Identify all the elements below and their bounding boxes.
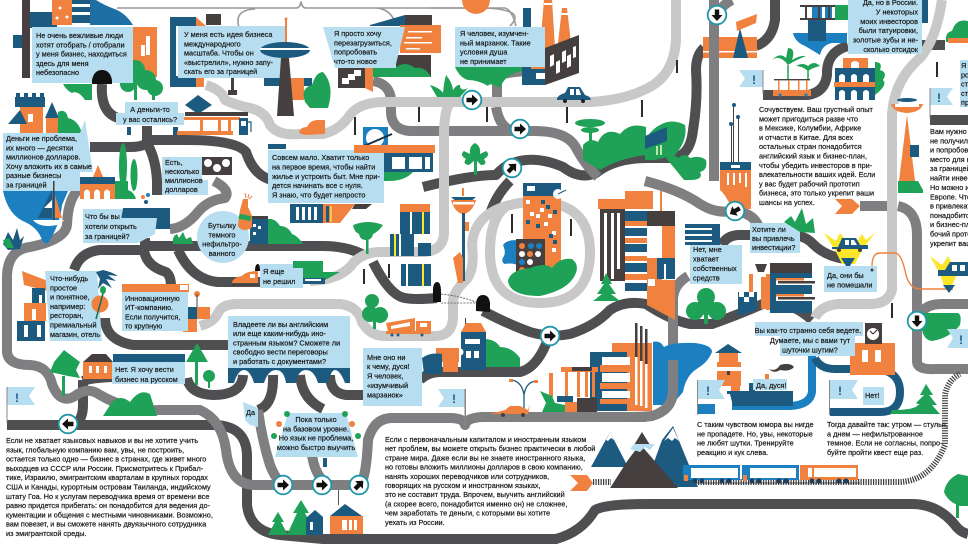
- arrow: bottom right 1: [274, 476, 292, 494]
- icon: weird-behaviour clock building: [850, 323, 895, 375]
- panel: several million: долларов: [165, 185, 198, 194]
- flag: bottom centre: !: [452, 392, 456, 406]
- panel: international idea: международного: [184, 39, 241, 48]
- panel: not decided: не решил: [263, 277, 295, 286]
- panel: international idea: «выстрелил», нужно запу-: [184, 58, 274, 67]
- arrow: bottom right 2: [313, 476, 331, 494]
- panel: rude people question: небезопасно: [36, 68, 79, 77]
- panel: I don't need it: [363, 348, 422, 406]
- icon: green tree: [686, 288, 726, 324]
- panel: something simple: [45, 271, 102, 341]
- text block: with capital and language: нанять хороших переводчиков или сотрудников,: [385, 472, 549, 481]
- text block: then let's do this: темное. Если не согласны, попро-: [827, 439, 943, 448]
- icon: factory with chimneys: [522, 0, 579, 85]
- icon: big striped building: [598, 191, 675, 320]
- sub-panel: text what to do with sad experience: бизнеса, это только укрепит ваши: [759, 189, 874, 198]
- panel: emerald man: ный марзанок. Такие: [460, 38, 531, 47]
- panel: not enough own funds: хватает: [693, 254, 719, 264]
- panel: money left question: у вас остались?: [123, 115, 177, 124]
- text block: with capital and language: Если с первоначальным капиталом и иностранным языком: [385, 435, 586, 444]
- panel: emerald man: [455, 27, 545, 88]
- panel: money left question: [116, 102, 184, 125]
- text block: then let's do this: буйте пройти квест еще раз.: [827, 448, 923, 457]
- text block: with capital and language: [385, 435, 596, 527]
- panel: several million: Есть,: [165, 158, 183, 167]
- text block: with capital and language: чем заработать те деньги, с которыми вы хотите: [385, 509, 550, 518]
- icon: building stripes and orange roof: [290, 204, 372, 223]
- panel: business in Russian: бизнес на русском: [115, 375, 178, 384]
- arrow: right upper: [463, 91, 481, 109]
- panel: international idea: масштаба. Чтобы он: [184, 49, 254, 58]
- flag: humour: [697, 380, 725, 415]
- panel: something simple: простое: [50, 283, 77, 292]
- sub-panel: text what to do with sad experience: чтобы убедить инвесторов в при-: [759, 161, 873, 170]
- panel: what to open abroad: хотели открыть: [85, 222, 137, 231]
- panel: restart abroad: [323, 15, 441, 92]
- panel: dark unfiltered beer: Бутылку: [208, 221, 236, 230]
- flags: [6, 70, 968, 425]
- panel: right edge box: [960, 60, 968, 107]
- panel: yes dear: Да, дуся!: [756, 381, 787, 390]
- text block: without language skills: выходцев из СССР или России. Присмотритесь к Прибал-: [6, 464, 204, 473]
- icon: skew building left: [17, 271, 48, 341]
- icon: orange car: [232, 264, 260, 286]
- arrow: right middle: [511, 120, 529, 138]
- panel: not enough own funds: Нет, мне: [693, 245, 722, 254]
- icon: yellow car far right: [930, 256, 968, 293]
- icon: pine tree: [593, 273, 620, 301]
- icon: green bush near lamp: [540, 391, 565, 412]
- text block: without language skills: язык, глобальную компанию вам, увы, не построить,: [6, 445, 184, 454]
- panel: dark unfiltered beer: темного: [209, 230, 235, 239]
- panel: strange behaviour: Вы как-то странно себя ведете.: [755, 326, 861, 335]
- panel: money is no problem: миллионов долларов.: [6, 153, 80, 162]
- panel: basic level: [271, 411, 361, 457]
- panel: money is no problem: Деньги не проблема,: [6, 134, 77, 143]
- icon: navy car: [557, 87, 591, 103]
- icon: left tree: [50, 350, 80, 396]
- flag: far right: [947, 329, 968, 348]
- panel: innovative IT company: [122, 292, 188, 331]
- panel: international idea: скать его за границей: [184, 67, 257, 76]
- icon: domino: [202, 157, 232, 175]
- panel: something simple: и понятное,: [50, 293, 90, 302]
- icon: oil pump: [703, 0, 757, 181]
- flag: no: !: [838, 384, 842, 398]
- thin grey top connector lines: [117, 2, 516, 30]
- icon: green hills: [583, 126, 646, 170]
- panel: basic level: Пока только: [295, 415, 337, 424]
- panel: money is no problem: Хочу вложить их в самые: [6, 162, 92, 171]
- panel: do you speak languages: или еще каким-нибудь ино-: [233, 329, 326, 338]
- icon: antennas building: [720, 103, 751, 209]
- text block: without language skills: [6, 436, 213, 538]
- panel: I don't need it: «изумчивый: [367, 381, 408, 390]
- panel: innovative IT company: то крупную: [125, 322, 163, 331]
- panel: dark unfiltered beer: [197, 211, 249, 263]
- text block: with capital and language: говорящих на русском и иностранном языках,: [385, 481, 541, 490]
- sub-panel: text what to do with sad experience: английский язык и бизнес-план,: [759, 152, 867, 160]
- panel: international idea: [170, 14, 285, 95]
- icon: yellow car: [824, 233, 875, 269]
- road network: medium grey routes: [7, 71, 968, 485]
- panel: not much left: на первое время, чтобы найти: [272, 162, 375, 171]
- panel: innovative IT company: Если получится,: [125, 312, 180, 321]
- sub-panel: text what to do with sad experience: у вас будет рабочий прототип: [759, 179, 860, 188]
- panel: several million: [162, 157, 208, 195]
- icon: palm and orange ball: [92, 270, 118, 319]
- icon: house above pond: [715, 344, 742, 362]
- flag: oil field: [739, 70, 764, 94]
- icon: top-left factory and cloud: [13, 0, 157, 100]
- icon: water tower: [793, 5, 848, 55]
- panel: money is no problem: за границей: [6, 180, 47, 190]
- arrow: up-right: [499, 155, 525, 181]
- panel: not decided: Я еще: [263, 267, 284, 276]
- panel: what to open abroad: за границей?: [85, 232, 130, 241]
- text block: then let's do this: [827, 420, 948, 457]
- tree by tunnel: [120, 60, 163, 100]
- panel: tattooed investors: сколько отсидок: [863, 45, 919, 54]
- icon: orange car low: [490, 404, 530, 417]
- text block: with such sense of humour: не любят шутки. Тренируйте: [697, 439, 794, 448]
- panel: rude people question: [32, 27, 133, 83]
- panel: international idea: У меня есть идея бизнеса: [184, 30, 273, 39]
- text block: without language skills: остается только одно — бизнес в странах, где живет много: [6, 455, 206, 464]
- panel: not much left: Я знаю, что будет непросто: [272, 191, 365, 200]
- text block: with capital and language: это не составит труда. Впрочем, выучить английский: [385, 490, 565, 499]
- flag: bottom left: [6, 387, 35, 423]
- sub-panel: text what to do with sad experience: [759, 105, 875, 207]
- panel: not enough own funds: средств: [693, 274, 720, 282]
- road network: light grey routes: [200, 0, 942, 336]
- panel: basic level: можно быстро выучить: [277, 443, 355, 452]
- panel: business in Russian: Нет. Я хочу вести: [115, 365, 174, 374]
- panel: strange behaviour: [755, 322, 863, 356]
- icon: tunnels with dashed link: [433, 282, 490, 312]
- icon: small plant: [173, 232, 193, 244]
- icon: arched bridge: [80, 165, 136, 199]
- panel: money is no problem: [3, 120, 93, 191]
- panel: emerald man: не принимает: [460, 57, 507, 66]
- panel: innovative IT company: Инновационную: [125, 294, 180, 303]
- arrow: down-left: [722, 198, 748, 224]
- panel: not enough own funds: [685, 224, 742, 284]
- icon: house with roof: [422, 318, 520, 374]
- panel: I don't need it: марзанок»: [367, 390, 403, 400]
- panel: do you speak languages: свободно вести переговоры: [233, 348, 328, 357]
- icon: bus stop with sign: [354, 127, 435, 181]
- panel: basic level: Но язык не проблема,: [279, 434, 353, 442]
- icon: tree left of truck: [362, 294, 388, 329]
- icon: pair of trees: [186, 343, 215, 388]
- text block: with capital and language: нет проблем, вы можете открыть бизнес практически в любой: [385, 444, 596, 453]
- panel: do you speak languages: Владеете ли вы английским: [233, 320, 328, 329]
- panel: want investments: вы привлечь: [752, 234, 795, 243]
- icon: tunnel: [92, 70, 112, 84]
- panel: right edge box: ст: [961, 80, 968, 89]
- icon: green hill with signboard: [645, 122, 706, 180]
- sub-panel: text what to do with sad experience: и отчасти в Китае. Для всех: [759, 133, 853, 142]
- panel: restart abroad: попробовать: [334, 48, 377, 57]
- icon: bottom pines: [268, 500, 316, 535]
- panel: money is no problem: их много — десятки: [6, 143, 73, 152]
- icon: green and white vehicle: [293, 261, 340, 284]
- icon: pine right: [890, 384, 940, 414]
- icon: gas station: [177, 95, 251, 135]
- icon: bottom-right tree: [944, 474, 968, 518]
- panel: tattooed investors: моих инвесторов: [860, 17, 918, 26]
- text block: right edge: [930, 127, 968, 248]
- panel: basic level: на базовом уровне.: [283, 424, 349, 434]
- panel: what to open abroad: Что бы вы: [85, 212, 120, 221]
- panel: not enough own funds: собственных: [693, 264, 737, 273]
- text block: with capital and language: (а скорее всего, понадобится именно он) не сложнее,: [385, 499, 567, 508]
- panel: right edge box: Я: [961, 61, 966, 70]
- panel: tattooed investors: золотые зубы и не-: [853, 36, 919, 45]
- sub-panel: text what to do with sad experience: остальных стран понадобится: [759, 142, 862, 151]
- panel: not much left: Совсем мало. Хватит только: [272, 153, 369, 162]
- icon: factory with checks: [738, 263, 815, 316]
- text block: without language skills: вам повезет, и вы сможете нанять двуязычного сотрудника: [6, 520, 207, 529]
- icon: tree at right of ship: [353, 222, 383, 254]
- panel: do you speak languages: и работать с документами?: [233, 357, 326, 366]
- panel: dark unfiltered beer: нефильтро-: [202, 240, 242, 249]
- panel: rude people question: у меня бизнес, находиться: [36, 50, 127, 59]
- icon: mountains: [591, 426, 698, 488]
- panel: business in Russian: [83, 354, 185, 384]
- icon: central tower in ring: [502, 183, 577, 296]
- panel: rude people question: хотят отобрать / отобрали: [36, 40, 125, 49]
- panel: something simple: магазин, отель: [50, 330, 100, 339]
- icon: leaf plant: [430, 75, 468, 97]
- panel: emerald man: условия душа: [460, 48, 508, 57]
- panel: restart abroad: Я просто хочу: [334, 29, 382, 38]
- flag: bottom left: !: [15, 391, 19, 405]
- panel: dark unfiltered beer: ванного: [209, 249, 235, 258]
- text block: with such sense of humour: С таким чувством юмора вы нигде: [697, 420, 814, 429]
- text block: with capital and language: уехать из России.: [385, 518, 445, 527]
- panel: what to open abroad: [83, 193, 170, 243]
- text block: without language skills: тике, Израилю, эмигрантским кварталам в крупных городах: [6, 473, 208, 482]
- icon: orange bar and squares: [122, 284, 210, 332]
- panel: would not hurt: не помешали: [827, 280, 872, 289]
- icon: green hill right: [922, 313, 961, 341]
- railway track: [593, 374, 960, 483]
- panel: not decided: [260, 264, 303, 288]
- icon: clover tree: [462, 143, 488, 175]
- text block: then let's do this: Тогда давайте так: утром — стулья,: [827, 420, 948, 429]
- panel: something simple: например:: [50, 302, 85, 311]
- sub-panel: text what to do with sad experience: шансы на успех.: [759, 198, 815, 207]
- flag: bottom centre: [438, 389, 466, 425]
- text block: then let's do this: а днем — нефильтрованное: [827, 429, 923, 438]
- icon: green bush: [103, 392, 157, 416]
- road network: coloured lower routes: [732, 253, 953, 412]
- text block: with capital and language: но готовы вложить миллионы долларов в свою компанию,: [385, 463, 583, 472]
- icon: acacia tree: [575, 119, 605, 145]
- panel: tattooed investors: У некоторых: [876, 7, 918, 16]
- panel: want investments: [750, 223, 800, 253]
- text block: with such sense of humour: реакцию и кук слева.: [697, 448, 768, 457]
- panel: I don't need it: Мне оно ни: [367, 353, 405, 362]
- panel: several million: миллионов: [165, 176, 203, 185]
- text block: without language skills: США и Канады, курортным островам Таиланда, индийскому: [6, 482, 211, 492]
- panel: yes: [243, 402, 258, 427]
- icon: bottom houses: [306, 490, 363, 535]
- panel: something simple: премиальный: [50, 320, 97, 330]
- text block: with such sense of humour: не пропадете. Но, увы, некоторые: [697, 429, 813, 438]
- panel: restart abroad: перезагрузиться,: [334, 38, 392, 47]
- flag: humour: !: [706, 384, 710, 398]
- flag: far right: !: [959, 333, 963, 347]
- flag: no: [829, 380, 858, 415]
- panel: strange behaviour: Думаете, мы с вами тут: [770, 336, 851, 345]
- panel: emerald man: Я человек, изумчен-: [460, 29, 529, 38]
- small black pegs: [127, 60, 938, 467]
- panel: would not hurt: [824, 266, 877, 292]
- panel: want investments: инвестиции?: [752, 243, 795, 252]
- icon: rising sun: [462, 0, 490, 14]
- panel: I don't need it: к чему, дуся!: [367, 362, 410, 371]
- icon: orange tower behind ship: [717, 362, 741, 394]
- sub-panel: text what to do with sad experience: может пригодиться разве что: [759, 114, 858, 123]
- panel: would not hurt: Да, они бы: [827, 271, 864, 280]
- panel: not much left: [268, 150, 384, 203]
- panel: money is no problem: разные бизнесы: [6, 171, 61, 180]
- icon: factory lattice and pond: [549, 323, 712, 417]
- icon: orange chevrons: [570, 199, 860, 491]
- arrow: left: [59, 415, 77, 433]
- icon: palm bus: [772, 48, 820, 97]
- panel: several million: несколько: [165, 167, 199, 176]
- panel: rude people question: здесь для меня: [36, 59, 89, 68]
- text block: without language skills: штату Гоа. Но к услугам переводчика время от времени все: [6, 492, 209, 501]
- panel: do you speak languages: [228, 316, 350, 383]
- icon: train: [683, 465, 858, 484]
- text block: without language skills: кументации и общения с местными чиновниками. Возможно,: [6, 510, 213, 519]
- arrow: bottom up-right: [346, 472, 372, 498]
- text block: without language skills: Если не хватает языковых навыков и вы не хотите учить: [6, 436, 198, 445]
- panel: no: Нет!: [865, 391, 879, 400]
- arrow: right down: [908, 312, 926, 330]
- icon: lake with sailboat: [3, 181, 68, 250]
- icon: green hill with car: [946, 20, 968, 43]
- panel: right edge box: ст: [961, 89, 968, 98]
- panel: not much left: дется начинать все с нуля.: [272, 181, 363, 190]
- arrow: top down: [708, 6, 726, 24]
- panel: strange behaviour: шуточки шутим?: [782, 346, 838, 354]
- panel: yes: Да: [246, 408, 256, 417]
- icon: aqueduct: [834, 58, 885, 100]
- sub-panel: text what to do with sad experience: в Мексике, Колумбии, Африке: [759, 124, 861, 133]
- icon: poplars: [119, 143, 138, 191]
- panel: innovative IT company: ИТ-компанию.: [125, 303, 173, 312]
- panel: want investments: Хотите ли: [752, 225, 786, 234]
- panel: I don't need it: Я человек,: [367, 372, 403, 380]
- panel: money left question: А деньги-то: [130, 105, 170, 114]
- icon: blue tall buildings: [390, 204, 431, 286]
- sub-panel: text what to do with sad experience: Сочувствуем. Ваш грустный опыт: [759, 105, 873, 114]
- panel: rude people question: Не очень вежливые люди: [36, 31, 123, 40]
- arrow: centre right: [541, 327, 559, 345]
- text block: right edge: Вам нужно: [930, 127, 967, 136]
- panel: do you speak languages: странным языком? Сможете ли: [233, 338, 340, 347]
- sub-panel: text what to do with sad experience: влекательности ваших идей. Если: [759, 170, 875, 179]
- text block: with such sense of humour: [697, 420, 814, 457]
- panel: not much left: жилье и устроить быт. Мне при-: [272, 172, 380, 181]
- icon: castle: [8, 93, 82, 133]
- panel: tattooed investors: [848, 0, 928, 54]
- icon: leafy plant: [784, 208, 815, 233]
- text block: without language skills: равно придется прибегать: он понадобится для ведения до-: [6, 501, 211, 510]
- flag: oil field: !: [752, 73, 756, 87]
- icon: house and bush: [250, 216, 303, 244]
- icon: beer bottle: [238, 193, 252, 230]
- icon: observation tower: [451, 188, 476, 283]
- panel: tattooed investors: были татуировки,: [859, 26, 918, 35]
- panel: something simple: ресторан,: [50, 311, 83, 320]
- flag: right edge: [930, 88, 953, 118]
- panel: restart abroad: что-то новое: [334, 57, 377, 66]
- icon: orange car: [299, 120, 325, 135]
- flag: right edge: !: [937, 91, 941, 105]
- icon: saucer tower: [260, 18, 331, 116]
- icon: saucer spike tower: [891, 98, 923, 193]
- icon: truck: [386, 318, 431, 336]
- icon: street lamp: [509, 379, 538, 410]
- text block: with capital and language: стране мира. Даже если вы не знаете иностранного языка,: [385, 453, 585, 462]
- panel: something simple: Что-нибудь: [50, 274, 88, 283]
- icon: ship: [727, 364, 794, 406]
- text block: without language skills: из эмигрантской среды.: [6, 529, 87, 538]
- panel: no: [863, 387, 884, 405]
